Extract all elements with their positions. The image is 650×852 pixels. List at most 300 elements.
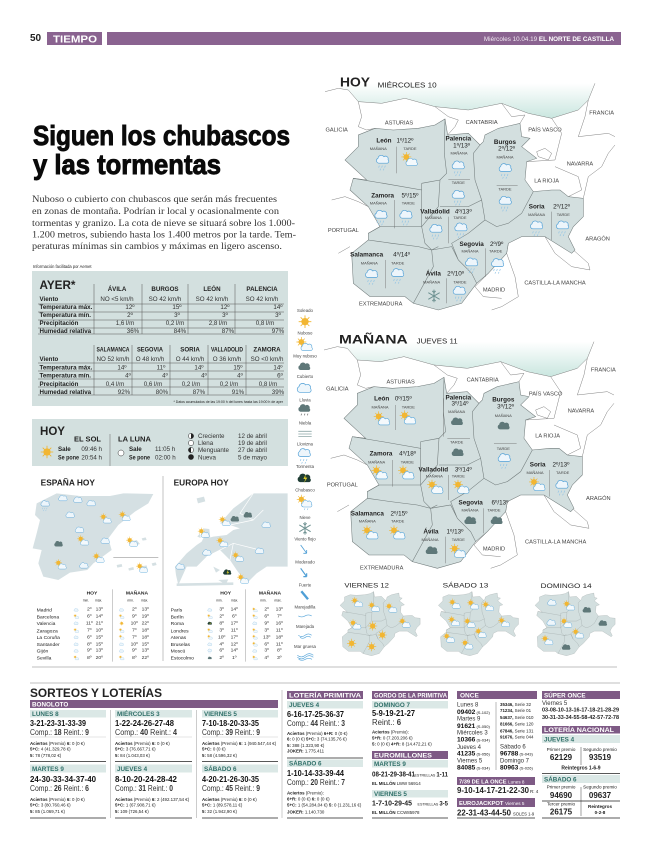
city forecasts: 3º/14º [455, 467, 472, 474]
region labels: MADRID [483, 547, 505, 553]
table: spain temperatures: 20º [96, 655, 103, 661]
panel: legend: Lluvia [299, 397, 311, 402]
panel: bonoloto: BONOLOTO [32, 702, 68, 708]
table: europe temperatures: 11º [276, 641, 283, 647]
table: ayer upper: 0,2 l/m [166, 320, 184, 327]
table: spain temperatures: 15º [142, 641, 149, 647]
draw: lunes 8: Aciertos (Premio) 6: 0 (0 €) [30, 741, 85, 746]
panel: legend: Tormenta [296, 464, 315, 469]
draw: jueves 4: 5: 109 (726,54 €) [115, 809, 149, 814]
draw: jueves 4: Aciertos (Premio) 6+R: 0 (0 €) [287, 731, 348, 736]
table: europe temperatures: 8º [277, 648, 282, 654]
table: europe temperatures: 6º [219, 648, 224, 654]
panel: españa hoy [33, 477, 158, 662]
draw: miércoles 3: 5+C: 3 (76.667,71 €) [115, 746, 156, 752]
panel: bonoloto [30, 700, 278, 818]
city forecasts: MAÑANA [528, 212, 546, 217]
mini map: domingo 14 [535, 583, 615, 656]
table: europe temperatures: 12º [231, 641, 238, 647]
table: spain temperatures: Sevilla [37, 656, 52, 662]
table: ayer upper [38, 284, 285, 335]
table: spain temperatures: Madrid [37, 608, 52, 614]
panel: once: Viernes 5 [457, 758, 483, 764]
rules [30, 667, 620, 683]
divider [109, 434, 111, 466]
region labels: GALICIA [326, 387, 349, 393]
panel: once: Lunes 8 [457, 702, 479, 708]
table: ayer upper: 12º [125, 304, 135, 311]
panel: lotería primitiva: LOTERÍA PRIMITIVA [289, 692, 362, 700]
panel: 7/39 de la once: 9-10-14-17-21-22-30 [457, 786, 530, 795]
block: moon phases: Llena [198, 440, 214, 447]
city forecasts: Zamora [371, 192, 395, 199]
draw: jueves 4: JUEVES 4 [289, 702, 320, 709]
panel: euromillones: 1-7-10-29-45 [372, 800, 412, 808]
table: ayer lower: 92% [118, 389, 131, 396]
city forecasts: TARDE [391, 260, 405, 265]
draw: viernes 5: 5+C: 0 (0 €) [202, 746, 226, 752]
panel: gordo de la primitiva: Aciertos (Premio): [372, 730, 409, 734]
city forecasts: TARDE [557, 212, 570, 217]
table: europe temperatures: 10º [218, 634, 226, 640]
panel: súper once: 30-31-33-34-55-58-42-57-72-78 [542, 715, 619, 721]
table: europe temperatures: 13º [263, 634, 270, 640]
table: ayer lower: 91% [232, 389, 245, 396]
region labels [326, 110, 614, 308]
draw: sábado 6: 5+C: 1 (89.578,11 €) [202, 802, 243, 808]
draw: sábado 6: 4-20-21-26-30-35 [202, 775, 259, 784]
table: spain temperatures: 21º [96, 620, 103, 626]
panel: euromillones: EL MILLÓN CCW85978 [372, 810, 420, 815]
panel: lotería nacional: 93519 [589, 753, 612, 762]
table: spain temperatures: 2º [132, 607, 137, 613]
region labels: NAVARRA [568, 409, 594, 415]
draw: sábado 6: 5+C: 1 (54.284,04 €) 5: 0 (1.231,16 €) [287, 802, 362, 808]
header bar [30, 32, 621, 46]
block: el sol: Sale [58, 446, 71, 453]
header bar: TIEMPO [53, 34, 97, 46]
panel: hoy sun and moon [32, 419, 288, 466]
table: spain temperatures: La Coruña [37, 635, 60, 641]
table: ayer upper: 87% [222, 328, 235, 335]
draw: sábado 6: SÁBADO 6 [204, 764, 237, 773]
heading: mañana: JUEVES 11 [417, 338, 458, 345]
draw: miércoles 3: MIÉRCOLES 3 [117, 709, 160, 718]
table: ayer lower: SEGOVIA [137, 346, 163, 354]
table: ayer lower: O 36 km/h [213, 356, 242, 363]
table: europe temperatures: 4º [264, 655, 269, 661]
city forecasts: MAÑANA [461, 508, 479, 513]
draw: lunes 8: 5+C: 4 (41.329,78 €) [30, 746, 71, 752]
panel: súper once: SÚPER ONCE [544, 690, 586, 700]
city forecasts: 1º/12º [397, 138, 414, 145]
draw: sábado 6: 5: 32 (1.942,90 €) [202, 809, 237, 814]
panel: once: 80963 (S-026) [500, 764, 533, 772]
table: europe temperatures: HOY [220, 590, 232, 596]
table: spain temperatures: mín. [83, 599, 89, 603]
panel: legend: Nieve [299, 515, 311, 520]
table: ayer lower: 4º [162, 372, 169, 380]
heading: mañana [339, 331, 458, 346]
table: europe temperatures: 1º [232, 655, 237, 661]
region labels: NAVARRA [567, 162, 593, 168]
city forecasts: Ávila [426, 268, 441, 277]
table: spain temperatures: 7º [132, 634, 137, 640]
panel: 7/39 de la once: 7/39 DE LA ONCE Lunes 8 [459, 780, 525, 786]
table: spain temperatures: 9º [87, 648, 92, 654]
city forecasts: 3º/12º [497, 403, 515, 410]
block: moon phases: Nueva [198, 454, 216, 462]
table: ayer lower: 6º [277, 372, 284, 380]
panel: once: 71234, Serie 01 [500, 708, 532, 713]
block: moon phases: 5 de mayo [238, 454, 267, 462]
draw: martes 9: Comp.: 26 Reint.: 6 [30, 784, 90, 793]
table: spain temperatures: 13º [96, 648, 103, 654]
divider [281, 690, 283, 818]
intro text: peraturas mínimas sin cambios y máximas en ligero ascenso. [32, 242, 282, 252]
region labels: LA RIOJA [535, 433, 560, 439]
table: ayer upper: 14º [273, 304, 283, 311]
city forecasts: TARDE [556, 470, 570, 475]
block: la luna: 02:00 h [155, 454, 176, 462]
table: spain temperatures: 10º [96, 628, 103, 634]
panel: euromillones: MARTES 9 [374, 761, 406, 768]
region labels: PORTUGAL [328, 228, 359, 234]
heading: mañana: MAÑANA [339, 331, 408, 346]
city forecasts: MAÑANA [370, 146, 387, 151]
title: Siguen los chubascos [33, 120, 290, 151]
heading: hoy: MIÉRCOLES 10 [378, 81, 437, 90]
city forecasts: MAÑANA [359, 519, 376, 524]
draw: lunes 8: LUNES 8 [32, 711, 59, 718]
region labels: ARAGÓN [586, 495, 611, 502]
table: spain temperatures: Valencia [37, 621, 56, 627]
table: spain temperatures: 7º [132, 628, 137, 634]
table: ayer lower: Temperatura máx. [40, 364, 93, 372]
table: spain temperatures: 2º [87, 607, 92, 613]
mini map: domingo 14: DOMINGO 14 [541, 583, 592, 590]
draw: jueves 4: JUEVES 4 [117, 766, 148, 773]
panel: once [457, 691, 537, 772]
block: moon phases: Menguante [198, 447, 230, 454]
panel: lotería primitiva [287, 691, 363, 818]
table: ayer upper: 2,8 l/m [209, 320, 227, 327]
table: europe temperatures: Bruselas [171, 642, 191, 648]
table: spain temperatures: 7º [87, 628, 92, 634]
table: europe temperatures: 16º [276, 620, 283, 626]
panel: lotería nacional: Reintegros 1-6-9 [561, 766, 601, 772]
draw: viernes 5 [202, 710, 278, 758]
region labels: CASTILLA-LA MANCHA [525, 539, 587, 545]
city forecasts: TARDE [402, 405, 415, 410]
map: hoy miércoles 10 [325, 76, 615, 310]
city forecasts: MAÑANA [368, 459, 386, 464]
panel: gordo de la primitiva: DOMINGO 7 [374, 702, 411, 709]
panel: once: 41235 (S-056) [457, 750, 490, 758]
panel: euromillones: ESTRELLAS 1-11 [415, 772, 449, 778]
city forecasts: Soria [529, 204, 545, 211]
table: ayer lower: ZAMORA [253, 346, 281, 354]
table: ayer lower: O 44 km/h [176, 356, 205, 363]
panel: lotería nacional: Tercer premio [547, 802, 575, 806]
panel: euromillones: EUROMILLONES [374, 752, 433, 760]
panel: gordo de la primitiva: Reint.: 6 [372, 718, 402, 727]
divider [162, 476, 164, 661]
city forecasts: TARDE [452, 537, 465, 542]
panel: legend: Cubierto [297, 374, 314, 379]
table: ayer lower: 0,8 l/m [259, 381, 277, 388]
city forecasts: MAÑANA [496, 154, 514, 159]
table: spain temperatures: Barcelona [37, 614, 59, 620]
table: ayer lower: 0,2 l/m [220, 381, 238, 388]
panel: lotería nacional: Primer premio [547, 784, 576, 790]
table: spain temperatures: Zaragoza [37, 628, 58, 634]
panel: euromillones: ESTRELLAS 3-5 [418, 802, 449, 808]
table: europe temperatures: máx. [274, 599, 282, 603]
table: europe temperatures: Roma [171, 621, 184, 627]
table: spain temperatures: 13º [96, 607, 103, 613]
draw: jueves 4: Comp.: 44 Reint.: 3 [287, 719, 346, 728]
table: spain temperatures: 11º [86, 620, 93, 626]
draw: jueves 4: 8-10-20-24-28-42 [115, 775, 177, 784]
draw: sábado 6: Comp.: 20 Reint.: 7 [287, 778, 345, 787]
city forecasts: Ávila [423, 526, 439, 535]
panel: once: 84085 (S-034) [457, 764, 490, 772]
panel: legend: Muy nuboso [293, 353, 317, 358]
table: spain temperatures [37, 589, 149, 662]
region labels: GALICIA [326, 128, 348, 134]
region labels [326, 367, 616, 572]
panel: euromillones [372, 751, 449, 818]
city forecasts: MAÑANA [426, 473, 443, 478]
panel: legend: Marejada [296, 624, 315, 629]
draw: sábado 6: SÁBADO 6 [289, 758, 322, 768]
city forecasts: TARDE [402, 200, 415, 205]
city forecasts: 2º/15º [391, 511, 408, 518]
region labels: FRANCIA [589, 110, 614, 116]
table: europe temperatures: 3º [219, 628, 224, 634]
table: ayer upper: BURGOS [151, 286, 179, 293]
panel: lotería nacional: Primer premio [547, 747, 576, 752]
table: europe temperatures: 11º [231, 628, 238, 634]
draw: viernes 5: 5: 58 (4.596,32 €) [202, 753, 237, 758]
table: europe temperatures: 13º [276, 607, 283, 613]
table: ayer upper: NO <5 km/h [100, 296, 134, 303]
intro text: en zonas de montaña. Podrían ir local y ocasionalmente con [32, 207, 279, 217]
table: europe temperatures: 6º [264, 641, 269, 647]
table: spain temperatures: 22º [142, 655, 149, 661]
city forecasts: 2º/12º [498, 146, 516, 153]
draw: jueves 4: Aciertos (Premio) 6: 2 (492.137,54 €) [115, 797, 190, 802]
city forecasts: TARDE [489, 249, 503, 254]
panel: once: 35346, Serie 32 [500, 702, 532, 707]
table: europe temperatures: Londres [171, 628, 189, 634]
table: ayer upper: 1,6 l/m [116, 320, 134, 327]
draw: lunes 8: 3-21-23-31-33-39 [30, 719, 86, 728]
panel: lotería nacional: LOTERÍA NACIONAL [544, 726, 614, 734]
block: la luna: LA LUNA [118, 436, 151, 444]
panel: gordo de la primitiva [372, 691, 448, 746]
mini map: sábado 13 [438, 580, 518, 656]
table: ayer upper: Temperatura máx. [40, 304, 93, 311]
panel: euromillones: EL MILLÓN LWW 56914 [372, 781, 421, 786]
table: europe temperatures: 3º [277, 655, 282, 661]
table: spain temperatures: 22º [142, 620, 149, 626]
table: ayer upper: 97% [272, 328, 285, 335]
draw: miércoles 3: Comp.: 40 Reint.: 4 [115, 728, 178, 737]
table: spain temperatures: 8º [87, 655, 92, 661]
table: spain temperatures: Santander [37, 642, 60, 648]
city forecasts: MAÑANA [495, 413, 512, 418]
intro text: Nuboso o cubierto con chubascos que serán más frecuentes [32, 194, 277, 205]
table: europe temperatures: 4º [219, 641, 224, 647]
panel: once: 81666, Serie 120 [500, 722, 534, 726]
table: europe temperatures: 6º [232, 613, 237, 619]
draw: viernes 5: VIERNES 5 [204, 711, 237, 718]
block: el sol [41, 436, 103, 462]
panel: eurojackpot [457, 798, 535, 818]
table: ayer lower: SO <0 km/h [251, 356, 284, 363]
panel: súper once: 03-08-10-13-16-17-18-21-28-29 [542, 708, 619, 714]
city forecasts: 2º/9º [490, 241, 504, 248]
header bar: Miércoles 10.04.19 EL NORTE DE CASTILLA [484, 36, 614, 43]
city forecasts: TARDE [452, 180, 465, 185]
table: spain temperatures: Gijón [37, 649, 49, 655]
city forecasts: TARDE [487, 508, 501, 513]
city forecasts: Valladolid [419, 467, 448, 474]
table: ayer upper: Precipitación [40, 320, 79, 327]
draw: sábado 6: Comp.: 45 Reint.: 9 [202, 784, 261, 793]
table: ayer lower: 0,4 l/m [106, 381, 124, 388]
region labels: ARAGÓN [585, 236, 610, 243]
table: europe temperatures: Estocolmo [171, 656, 194, 662]
table: ayer upper: Humedad relativa [40, 328, 92, 335]
table: ayer lower: NO 52 km/h [96, 356, 130, 363]
city forecasts: 2º/10º [447, 270, 465, 277]
panel: gordo de la primitiva: GORDO DE LA PRIMITIVA [374, 694, 448, 700]
city forecasts: MAÑANA [423, 279, 441, 284]
city forecasts: 0º/15º [395, 396, 412, 403]
draw: jueves 4 [287, 701, 363, 754]
table: ayer lower: 0,6 l/m [144, 381, 162, 388]
table: spain temperatures: MAÑANA [126, 589, 148, 596]
city forecasts: Soria [530, 462, 546, 469]
city forecasts: Zamora [370, 450, 393, 457]
panel: ayer [32, 271, 288, 406]
table: europe temperatures: 2º [219, 655, 224, 661]
panel: once: 91621 (S-050) [457, 723, 490, 730]
region labels: ASTURIAS [387, 379, 415, 385]
table: ayer lower: SORIA [180, 346, 200, 354]
panel: once: 10366 (S-034) [457, 736, 490, 744]
mini map: viernes 12 [340, 582, 420, 656]
table: spain temperatures: 8º [87, 641, 92, 647]
draw: miércoles 3: 1-22-24-26-27-48 [115, 719, 174, 728]
table: europe temperatures: Berlín [171, 614, 184, 620]
city forecasts: MAÑANA [461, 249, 479, 254]
table: spain temperatures: 13º [142, 607, 149, 613]
table: ayer lower: 80% [156, 389, 169, 396]
table: europe temperatures: 2º [264, 607, 269, 613]
city forecasts: Burgos [492, 397, 515, 404]
draw: sábado 6: 6+R: 0 (0 €) 6: 0 (0 €) [287, 796, 330, 802]
heading: hoy [340, 76, 437, 90]
table: ayer upper: SO 42 km/h [246, 296, 279, 303]
city forecasts: TARDE [401, 459, 414, 464]
draw: lunes 8: 5: 78 (778,02 €) [30, 753, 62, 758]
panel: súper once: Viernes 5 [542, 701, 568, 707]
city forecasts: MAÑANA [448, 409, 466, 414]
table: spain temperatures: 18º [142, 634, 149, 640]
table: europe temperatures [171, 589, 283, 662]
table: ayer upper: 0,8 l/m [256, 320, 274, 327]
table: europe temperatures: Moscú [171, 649, 186, 655]
map: spain [33, 493, 158, 580]
table: europe temperatures: MAÑANA [259, 589, 281, 596]
panel: once: ONCE [460, 692, 479, 700]
panel: lotería nacional: Reintegros [588, 804, 612, 809]
city forecasts: MAÑANA [421, 537, 439, 542]
panel: legend: Soleado [297, 308, 314, 313]
city forecasts: 5º/15º [402, 192, 419, 199]
city forecasts: Palencia [445, 394, 472, 401]
panel: once: 67846, Serie 131 [500, 728, 534, 734]
city forecasts: 4º/14º [393, 252, 411, 259]
draw: martes 9: 5: 85 (1.069,71 €) [30, 809, 65, 814]
region labels: CANTABRIA [467, 378, 499, 384]
city forecasts: 1º/13º [447, 528, 464, 535]
city forecasts: León [376, 138, 392, 145]
panel: euromillones: VIERNES 5 [374, 791, 407, 798]
panel: eurojackpot: EUROJACKPOT Viernes 5 [459, 801, 525, 807]
block: la luna: 11:05 h [155, 446, 176, 453]
table: spain temperatures: 6º [87, 634, 92, 640]
table: spain temperatures: mín. [127, 599, 134, 603]
panel: once: Domingo 7 [500, 758, 530, 764]
table: ayer lower: 14º [117, 364, 127, 372]
panel: 7/39 de la once [457, 777, 539, 795]
table: ayer upper: Temperatura mín. [40, 312, 91, 319]
panel: legend: Nuboso [298, 331, 313, 336]
panel: lotería nacional: 62129 [550, 753, 573, 762]
panel: lotería nacional: 26175 [550, 808, 573, 816]
city forecasts: MAÑANA [526, 470, 544, 475]
draw: sábado 6: JOKER: 1.140.730 [287, 810, 325, 814]
panel: gordo de la primitiva: 5-9-19-21-27 [372, 709, 415, 718]
table: europe temperatures: 14º [231, 607, 238, 613]
table: ayer lower: 11º [157, 364, 166, 372]
block: el sol: Se pone [58, 454, 79, 462]
panel: lotería nacional: JUEVES 4 [544, 736, 575, 744]
block: moon phases [188, 433, 267, 462]
panel: legend: Mar gruesa [294, 644, 317, 649]
region labels: PORTUGAL [327, 482, 358, 488]
table: ayer upper: Viento [40, 296, 59, 303]
table: spain temperatures: 6º [87, 613, 92, 619]
draw: martes 9: MARTES 9 [32, 766, 64, 773]
panel: lotería nacional: 0-2-8 [595, 810, 606, 815]
city forecasts: Valladolid [420, 208, 450, 215]
table: ayer lower: 14º [273, 364, 283, 372]
table: ayer lower: 0,2 l/m [182, 381, 200, 388]
table: spain temperatures: 8º [132, 655, 137, 661]
draw: lunes 8 [30, 710, 106, 758]
table: ayer upper: 3º [174, 312, 181, 319]
city forecasts: Palencia [445, 136, 472, 143]
table: spain temperatures: 19º [142, 613, 149, 619]
panel: legend: Chubasco [295, 487, 315, 492]
heading: hoy: HOY [340, 76, 371, 90]
